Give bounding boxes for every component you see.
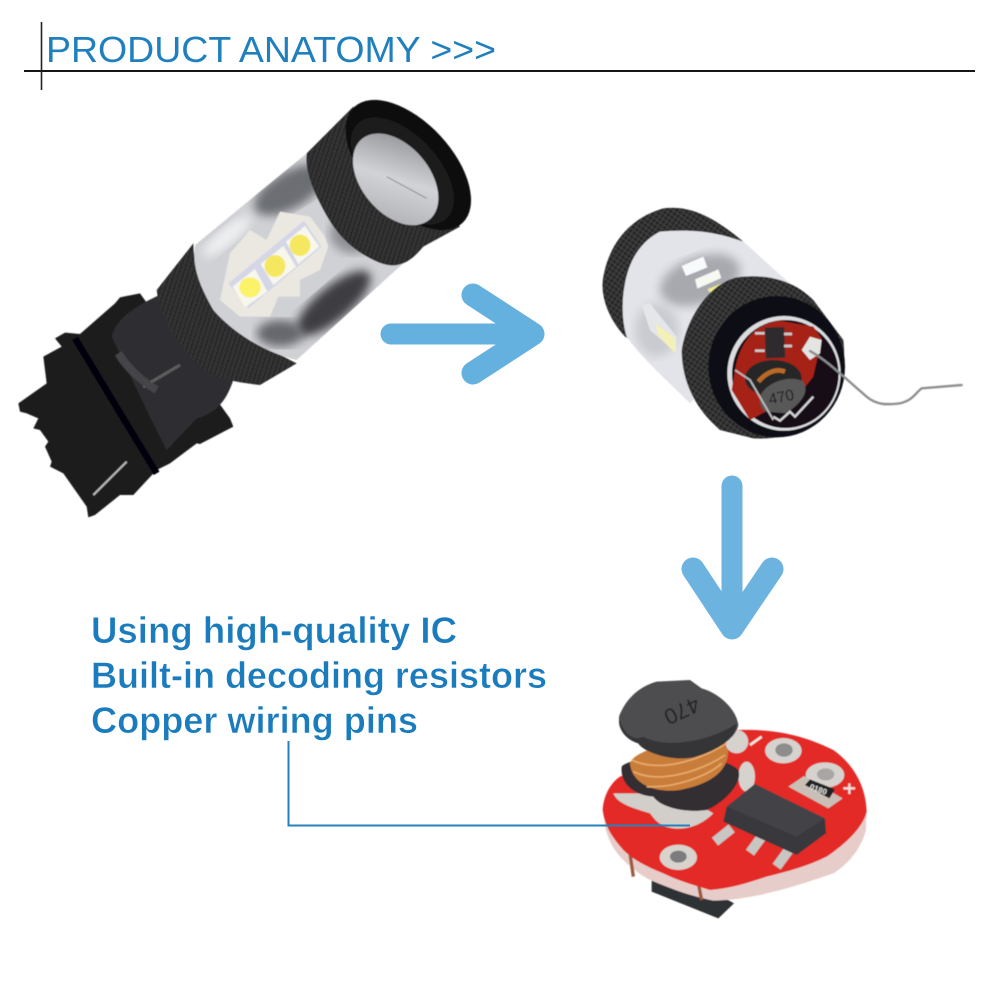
image: intact LED bulb with socket — [18, 77, 494, 517]
LED detail on tube — [635, 244, 747, 357]
feature: copper pins: Copper wiring pins — [91, 700, 418, 741]
connector under board — [652, 880, 734, 918]
lower knurled ring — [157, 243, 297, 385]
inductor top cap — [619, 680, 738, 758]
regulator pins — [715, 828, 790, 867]
feature list — [91, 610, 547, 741]
arrow: right — [391, 295, 533, 373]
rear knurled ring — [603, 208, 743, 347]
LED board — [220, 212, 328, 317]
inductor cap — [760, 379, 805, 413]
red PCB top — [603, 730, 867, 890]
socket neck — [112, 293, 233, 450]
LED chips — [233, 269, 267, 307]
image: driver circuit board — [603, 680, 867, 918]
image: bulb rear view with driver — [603, 208, 962, 439]
clear tube — [194, 153, 403, 360]
front face bezel — [708, 296, 845, 437]
feature: IC: Using high-quality IC — [91, 610, 457, 651]
top knurled ring — [306, 107, 460, 265]
front bezel — [323, 77, 494, 253]
arrow: down — [693, 486, 772, 628]
clear tube — [623, 231, 793, 403]
resistor code: 0180 — [808, 782, 829, 797]
solder blob — [802, 337, 822, 360]
copper winding — [630, 742, 728, 791]
wires — [773, 397, 813, 421]
solder pads — [765, 738, 802, 763]
lower inductor flange — [622, 756, 739, 811]
red driver PCB — [732, 321, 822, 420]
inductor marking: 470 — [767, 387, 796, 409]
feature: resistors: Built-in decoding resistors — [91, 655, 547, 696]
front knurled ring — [682, 276, 844, 439]
leader line from text to board — [288, 741, 690, 826]
socket base — [18, 293, 233, 517]
resistor — [788, 776, 843, 808]
silver rim — [727, 316, 841, 431]
inductor marking: 470 — [660, 692, 704, 730]
coil winding — [745, 360, 802, 397]
board side edge — [604, 770, 867, 901]
white heat-sink tabs — [220, 212, 328, 317]
title: PRODUCT ANATOMY >>> — [46, 29, 496, 70]
regulator IC — [723, 784, 826, 855]
lens — [336, 117, 456, 242]
IC chip — [765, 327, 785, 358]
PCB strip — [228, 221, 322, 308]
